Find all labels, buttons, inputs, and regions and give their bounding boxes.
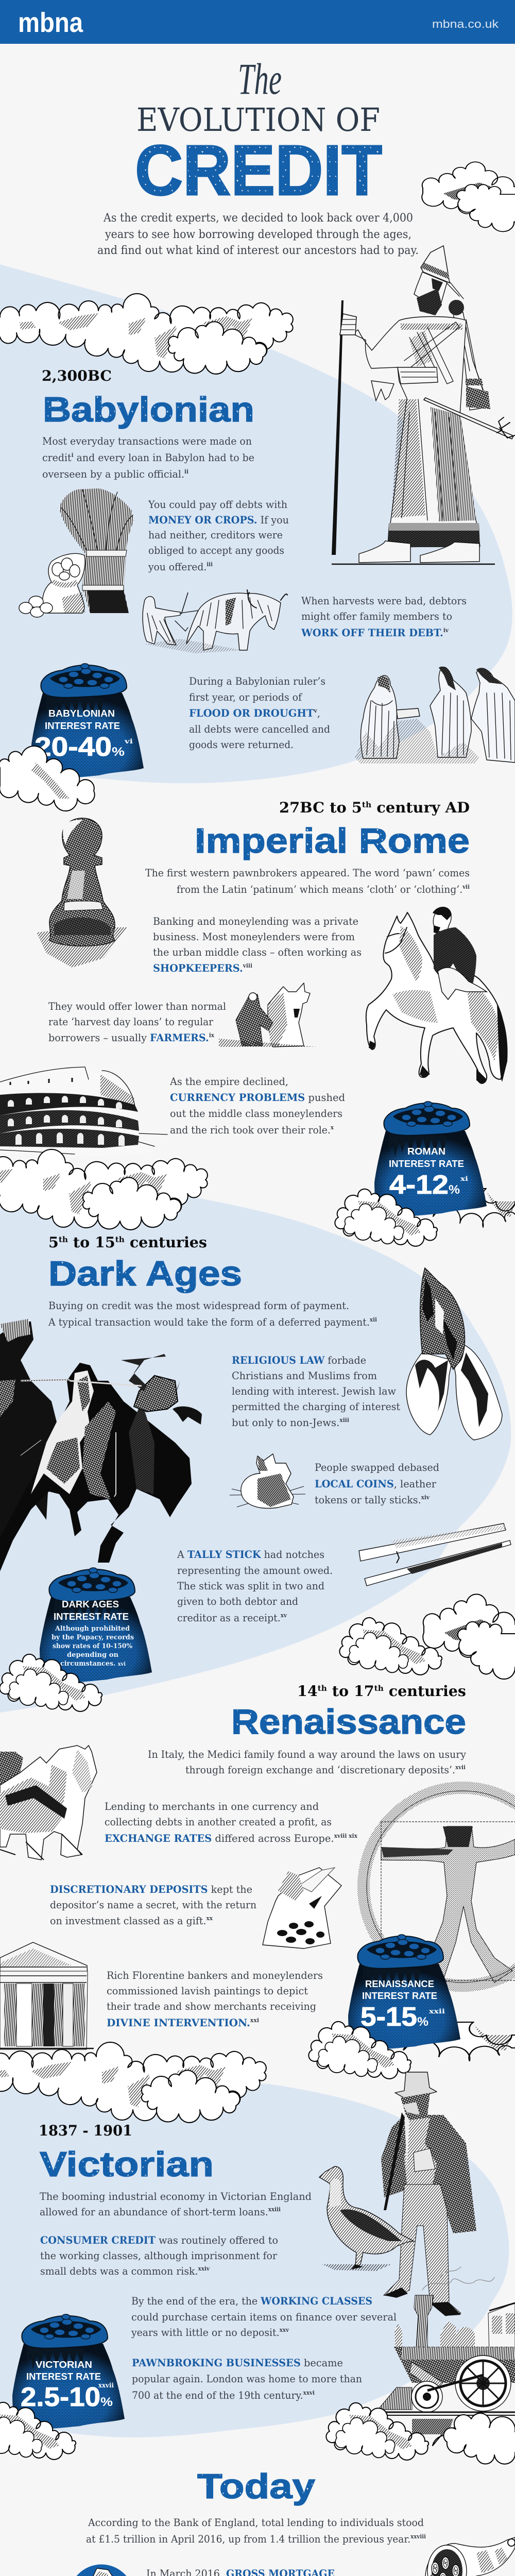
text: working classes: xxv — [280, 2327, 289, 2333]
text: religious law: permitted the charging of interest — [232, 1400, 400, 1413]
text: pawnbroking businesses: xxvi — [303, 2389, 315, 2396]
text: money or crops: had neither, creditors were — [148, 529, 283, 541]
heading: Imperial Rome: century AD — [371, 799, 470, 816]
text: Victorian intro: allowed for an abundance of short-term loans. — [40, 2206, 281, 2218]
text: consumer credit: small debts was a common risk. — [40, 2265, 207, 2277]
text: work off their debt: When harvests were bad, debtors — [301, 595, 467, 607]
sack: Renaissance interest rate — [348, 1935, 460, 2050]
text: tally stick: representing the amount owed. — [177, 1564, 333, 1577]
text: flood or drought: goods were returned. — [189, 738, 294, 751]
heading: Renaissance: th — [374, 1684, 384, 1693]
heading: Renaissance: th — [318, 1684, 327, 1693]
text: divine intervention: DIVINE INTERVENTION. — [107, 2016, 250, 2029]
text: Babylonian intro: i — [72, 452, 74, 459]
heading: Victorian: 1837 - 1901 — [39, 2122, 132, 2139]
illustration: chess pawn — [37, 818, 128, 968]
header bar — [0, 0, 515, 44]
text: local coins: xiv — [421, 1494, 430, 1501]
sack: Dark Ages interest rate: by the Papacy, records — [52, 1634, 134, 1641]
cloud: above Victorian — [0, 2042, 266, 2123]
text: tally stick: creditor as a receipt. — [177, 1612, 287, 1624]
heading: Imperial Rome: Imperial Rome — [195, 821, 470, 860]
text: local coins: tokens or tally sticks. — [315, 1494, 426, 1506]
text: money or crops: iii — [207, 561, 213, 568]
text: Dark Ages intro: Buying on credit was the most widespread form of payment. — [48, 1299, 349, 1312]
text: working classes: years with little or no deposit. — [131, 2326, 288, 2338]
illustration: Roman rider on horse — [366, 907, 508, 1084]
text: work off their debt: iv — [443, 627, 449, 634]
text: currency problems: and the rich took over their role. — [170, 1124, 341, 1136]
text: flood or drought: first year, or periods of — [189, 691, 302, 703]
illustration: Colosseum — [0, 1067, 167, 1157]
background blob: Victorian — [0, 2076, 509, 2437]
text: money or crops: You could pay off debts with — [148, 498, 287, 511]
background blob: Dark Ages — [0, 1180, 511, 1713]
heading: Today: Today — [197, 2467, 315, 2506]
illustration: three women returning goods — [355, 667, 515, 764]
header url: mbna.co.uk — [432, 18, 499, 30]
sack: Renaissance interest rate: 5-15 — [360, 2002, 417, 2032]
text: divine intervention: Rich Florentine bankers and moneylenders — [107, 1969, 323, 1981]
text: work off their debt: WORK OFF THEIR DEBT. — [301, 626, 443, 639]
text: farmers: ix — [209, 1032, 214, 1039]
illustration: cow and milker — [219, 983, 317, 1047]
sack: Victorian interest rate: VICTORIAN — [36, 2360, 92, 2370]
heading: Imperial Rome: th — [362, 800, 371, 809]
text: Babylonian intro — [42, 435, 254, 480]
intro text: As the credit experts, we decided to look back over 4,000 — [103, 212, 413, 225]
illustration: wheat sheaf and sack — [19, 488, 134, 617]
heading: Renaissance: to 17 — [327, 1683, 374, 1700]
text: Today intro: at £1.5 trillion in April 2016, up from 1.4 trillion the previous year. — [86, 2533, 435, 2545]
cloud: front of Victorian sack — [0, 2402, 76, 2460]
background blob: Babylonian — [0, 264, 512, 783]
cloud: in front of Roman sack — [335, 1189, 437, 1246]
illustration: cornucopia and falling coins — [407, 2537, 515, 2576]
text: Today intro: xxviii — [410, 2533, 426, 2540]
sack: Roman interest rate: ROMAN — [407, 1146, 445, 1157]
heading: Renaissance: 14 — [297, 1683, 317, 1700]
text: discretionary deposits: on investment classed as a gift. — [50, 1914, 214, 1927]
illustration: Victorian man — [381, 2072, 494, 2316]
text: work off their debt — [301, 595, 467, 639]
text: Renaissance intro: xvii — [455, 1764, 466, 1771]
cloud: above Babylonian — [0, 294, 293, 374]
logo: mbna: mbna — [18, 7, 83, 38]
illustration: Babylonian king — [332, 246, 515, 564]
text: Dark Ages intro: A typical transaction would take the form of a deferred payment. — [48, 1316, 388, 1328]
text: flood or drought: , — [317, 707, 320, 719]
text: pawnbroking businesses: popular again. London was home to more than — [132, 2372, 362, 2385]
text: exchange rates: EXCHANGE RATES differed across Europe. — [105, 1832, 337, 1844]
heading: Dark Ages: th — [115, 1235, 125, 1244]
text: Rome intro: vii — [462, 884, 470, 890]
sack: Babylonian interest rate: vi — [124, 738, 133, 745]
heading: Victorian: Victorian — [40, 2145, 214, 2184]
text: divine intervention — [107, 1969, 323, 2029]
sack: Victorian interest rate: % — [100, 2395, 113, 2409]
text: religious law — [232, 1354, 400, 1429]
text: flood or drought — [189, 675, 330, 751]
text: currency problems: out the middle class moneylenders — [170, 1107, 342, 1120]
heading: Dark Ages: Dark Ages — [48, 1254, 242, 1293]
text: tally stick: The stick was split in two and — [177, 1580, 324, 1592]
text: Babylonian intro: and every loan in Babylon had to be — [74, 451, 254, 464]
text: divine intervention: xxi — [250, 2017, 259, 2024]
text: Renaissance intro: through foreign exchange and ‘discretionary deposits’. — [185, 1764, 473, 1776]
illustration: classical temple — [0, 1942, 94, 2049]
text: local coins: People swapped debased — [315, 1461, 439, 1473]
cloud: front of Renaissance sack — [308, 2022, 411, 2079]
sack: Renaissance interest rate: INTEREST RATE — [362, 1991, 437, 2001]
text: exchange rates: collecting debts in another created a profit, as — [105, 1816, 332, 1828]
illustration: horses and cart — [0, 1745, 97, 1860]
sack: Dark Ages interest rate: Although prohibited — [55, 1625, 130, 1633]
text: Rome intro: The first western pawnbrokers appeared. The word ‘pawn’ comes — [145, 867, 470, 879]
illustration: Vitruvian man — [364, 1788, 515, 1986]
heading: Dark Ages: centuries — [125, 1234, 207, 1251]
intro text: and find out what kind of interest our ancestors had to pay. — [97, 244, 419, 257]
text: tally stick: A TALLY STICK had notches — [177, 1548, 324, 1561]
text: discretionary deposits: DISCRETIONARY DEPOSITS kept the — [50, 1883, 252, 1895]
cloud: lower left overlap — [0, 746, 95, 811]
text: Victorian intro: xxiii — [268, 2206, 281, 2213]
text: currency problems: CURRENCY PROBLEMS pushed — [170, 1091, 345, 1104]
sack: Dark Ages interest rate: circumstances. xvi — [60, 1660, 126, 1668]
text: religious law: xiii — [339, 1417, 349, 1423]
text: discretionary deposits — [50, 1883, 256, 1927]
sack: Victorian interest rate: INTEREST RATE — [26, 2371, 101, 2382]
heading: Babylonian — [42, 367, 254, 429]
sack: Babylonian interest rate — [31, 664, 144, 779]
cloud: under train — [326, 2403, 515, 2464]
text: working classes — [131, 2295, 397, 2338]
text: local coins — [315, 1461, 439, 1506]
illustration: ox and ploughman — [143, 590, 287, 653]
heading: Renaissance — [231, 1683, 466, 1741]
text: pawnbroking businesses: 700 at the end of the 19th century. — [132, 2389, 314, 2401]
heading: Imperial Rome — [195, 799, 470, 860]
text: working classes: could purchase certain items on finance over several — [131, 2311, 397, 2323]
title: CREDIT — [135, 131, 382, 210]
text: Rome intro — [145, 867, 470, 895]
title: EVOLUTION OF — [136, 101, 380, 139]
text: flood or drought: v — [314, 707, 317, 714]
text: Rome intro: from the Latin ‘patinum’ which means ‘cloth’ or ‘clothing’. — [177, 883, 483, 895]
heading: Dark Ages: to 15 — [68, 1234, 115, 1251]
text: Babylonian intro: ii — [184, 468, 188, 475]
text: local coins: LOCAL COINS, leather — [315, 1478, 436, 1490]
text: Babylonian intro: overseen by a public official. — [42, 468, 192, 480]
text: Babylonian intro: credit — [42, 451, 73, 464]
illustration: hand and coin bag — [263, 1868, 341, 1948]
title — [135, 54, 382, 210]
text: work off their debt: might offer family members to — [301, 610, 452, 622]
illustration: praying hands — [406, 1268, 502, 1440]
text: exchange rates — [105, 1800, 357, 1844]
text: religious law: but only to non-Jews. — [232, 1416, 342, 1429]
text: money or crops: you offered. — [148, 561, 211, 573]
text: consumer credit: the working classes, although imprisonment for — [40, 2249, 277, 2262]
cloud: top right — [422, 162, 515, 231]
sack: Roman interest rate: INTEREST RATE — [389, 1159, 464, 1169]
text: consumer credit: xxiv — [198, 2265, 210, 2272]
sack: Dark Ages interest rate — [40, 1568, 152, 1683]
heading: Renaissance: centuries — [384, 1683, 466, 1700]
heading: Renaissance: Renaissance — [231, 1702, 466, 1741]
text: money or crops: obliged to accept any goods — [148, 544, 284, 556]
sack: Dark Ages interest rate: DARK AGES — [62, 1599, 119, 1609]
text: currency problems: x — [331, 1124, 334, 1131]
heading: Dark Ages: th — [59, 1235, 68, 1244]
illustration: knights on horseback — [0, 1319, 202, 1571]
cloud: above Renaissance — [339, 1594, 515, 1679]
text: Dark Ages intro: xii — [370, 1316, 377, 1323]
text: shopkeepers: business. Most moneylenders were from — [153, 930, 355, 943]
text: Victorian intro — [40, 2190, 312, 2218]
sack: Renaissance interest rate: RENAISSANCE — [365, 1979, 434, 1989]
text: tally stick: xv — [281, 1612, 287, 1619]
text: shopkeepers: viii — [243, 962, 252, 969]
sack: Renaissance interest rate: xxii — [429, 2008, 445, 2015]
text: shopkeepers: the urban middle class – often working as — [153, 946, 362, 958]
text: Dark Ages intro — [48, 1299, 377, 1328]
heading: Babylonian: 2,300BC — [42, 367, 112, 384]
text: Today intro — [86, 2516, 426, 2545]
text: currency problems: As the empire declined, — [169, 1075, 288, 1088]
sack: Roman interest rate: xi — [460, 1175, 469, 1182]
text: Babylonian intro: Most everyday transactions were made on — [42, 435, 252, 447]
illustration: goose — [319, 2166, 414, 2271]
sack: Babylonian interest rate: BABYLONIAN — [48, 708, 115, 719]
text: tally stick: given to both debtor and — [177, 1595, 298, 1607]
sack: Babylonian interest rate: 20-40 — [35, 732, 112, 762]
text: Today intro: According to the Bank of England, total lending to individuals stood — [88, 2516, 424, 2529]
heading: Dark Ages — [48, 1234, 242, 1293]
intro text: years to see how borrowing developed through the ages, — [105, 228, 411, 241]
sack: Victorian interest rate — [12, 2314, 125, 2430]
text: consumer credit — [40, 2234, 278, 2277]
text: exchange rates: xviii xix — [334, 1833, 357, 1839]
cloud: behind Roman sack — [433, 1189, 515, 1227]
text: working classes: By the end of the era, the WORKING CLASSES — [131, 2295, 372, 2307]
text: shopkeepers: SHOPKEEPERS. — [153, 962, 243, 974]
text: religious law: Christians and Muslims from — [232, 1369, 377, 1382]
sack: Victorian interest rate: 2.5-10 — [21, 2382, 100, 2412]
icon: house in circle — [69, 2565, 134, 2576]
text: pawnbroking businesses: PAWNBROKING BUSINESSES became — [132, 2357, 343, 2369]
text: exchange rates: Lending to merchants in one currency and — [105, 1800, 319, 1812]
text: religious law: RELIGIOUS LAW forbade — [232, 1354, 366, 1366]
text: flood or drought: FLOOD OR DROUGHT — [189, 707, 314, 719]
text: discretionary deposits: depositor’s name a secret, with the return — [50, 1899, 256, 1911]
text: farmers: borrowers – usually FARMERS. — [48, 1031, 212, 1044]
text: discretionary deposits: xx — [207, 1915, 213, 1922]
illustration: tally sticks — [359, 1523, 511, 1586]
text: money or crops — [148, 498, 289, 573]
text: flood or drought: During a Babylonian ruler’s — [189, 675, 325, 687]
text: divine intervention: their trade and show merchants receiving — [107, 2000, 316, 2012]
text: divine intervention: commissioned lavish paintings to depict — [107, 1985, 308, 1997]
text: farmers: They would offer lower than normal — [48, 1000, 226, 1012]
intro text — [97, 212, 419, 257]
sack: Renaissance interest rate: % — [417, 2015, 428, 2029]
text: Renaissance intro: In Italy, the Medici family found a way around the laws on usury — [148, 1748, 467, 1760]
text: shopkeepers — [153, 915, 362, 974]
text: religious law: lending with interest. Jewish law — [232, 1385, 396, 1397]
title: The — [238, 54, 282, 104]
text: money or crops: MONEY OR CROPS. If you — [148, 514, 289, 526]
text: flood or drought: all debts were cancelled and — [189, 723, 330, 735]
sack: Roman interest rate: 4-12 — [389, 1170, 449, 1200]
sack: Babylonian interest rate: % — [112, 745, 125, 759]
heading: Dark Ages: 5 — [48, 1234, 58, 1251]
sack: Dark Ages interest rate: show rates of 10-150% — [53, 1642, 133, 1650]
text: tally stick — [177, 1548, 333, 1624]
text: Victorian intro: The booming industrial economy in Victorian England — [40, 2190, 312, 2202]
illustration: steam train and factory — [373, 2295, 515, 2415]
text: shopkeepers: Banking and moneylending was a private — [153, 915, 358, 927]
heading: Babylonian: Babylonian — [43, 390, 254, 429]
heading: Imperial Rome: 27BC to 5 — [279, 799, 359, 816]
text: currency problems — [169, 1075, 345, 1136]
heading: Victorian — [39, 2122, 214, 2184]
sack: Roman interest rate — [374, 1101, 487, 1217]
text: consumer credit: CONSUMER CREDIT was routinely offered to — [40, 2234, 278, 2246]
illustration: small coin bag — [230, 1454, 305, 1509]
cloud: above Dark Ages — [0, 1149, 208, 1230]
cloud: front of Dark Ages sack — [0, 1654, 102, 1711]
text: pawnbroking businesses — [132, 2357, 362, 2401]
text: farmers: rate ‘harvest day loans’ to regular — [48, 1015, 213, 1028]
sack: Roman interest rate: % — [449, 1183, 460, 1197]
sack: Dark Ages interest rate: INTEREST RATE — [54, 1612, 129, 1622]
text: Renaissance intro — [148, 1748, 467, 1776]
sack: Dark Ages interest rate: depending on — [67, 1651, 119, 1659]
text: farmers — [48, 1000, 226, 1044]
sack: Babylonian interest rate: INTEREST RATE — [45, 721, 120, 731]
cloud: behind Renaissance sack — [404, 2022, 515, 2061]
sack: Victorian interest rate: xxvii — [98, 2382, 114, 2389]
